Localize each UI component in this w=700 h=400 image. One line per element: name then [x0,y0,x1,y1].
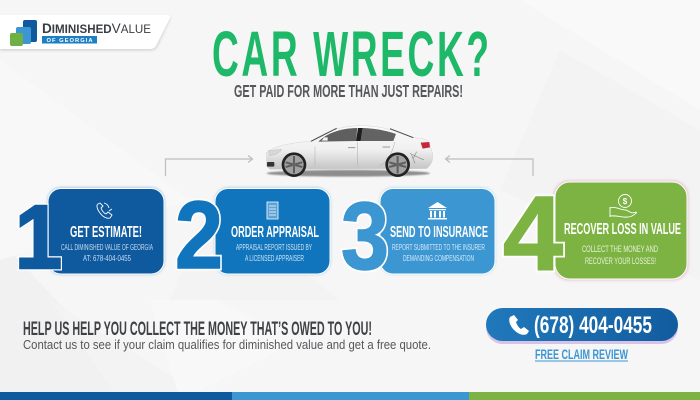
step heading: GET ESTIMATE! [70,224,142,241]
logo: DIMINISHEDVALUE [42,21,151,36]
number 4: 4 [503,175,563,293]
panel: step 1 get estimate [48,188,164,274]
logo: OF GEORGIA [46,38,93,44]
step description: APPRAISAL REPORT ISSUED BY [236,243,312,252]
step heading: SEND TO INSURANCE [390,224,488,241]
step description [61,243,153,263]
number 4: 4 [503,175,563,293]
panel: step 3 send to insurance [380,188,495,274]
icon: coin in hand: $ [623,197,628,206]
step description: CALL DIMINISHED VALUE OF GEORGIA [61,243,153,252]
footer colour bar [0,392,700,400]
number 2: 2 [175,182,223,289]
arrow: right to car [446,156,533,176]
icon: bank [428,202,447,220]
icon: phone [509,315,529,335]
step description [236,243,312,263]
number 3: 3 [341,183,389,290]
panel: step 2 order appraisal [215,188,330,274]
number 1: 1 [15,188,62,288]
number 3: 3 [341,183,389,290]
subtitle: GET PAID FOR MORE THAN JUST REPAIRS! [234,81,463,101]
phone number: (678) 404-0455 [534,312,652,339]
title: CAR WRECK? [212,20,492,91]
icon: phone [97,203,112,218]
step heading: ORDER APPRAISAL [231,224,319,241]
step description: A LICENSED APPRAISER [245,254,304,263]
link: free claim review [535,347,628,362]
step description: DEMANDING COMPENSATION [403,254,474,263]
icon: document [267,202,278,219]
call to action heading: HELP US HELP YOU COLLECT THE MONEY THAT’S OWED TO YOU! [23,318,372,340]
number 2: 2 [175,182,223,289]
call to action text: Contact us to see if your claim qualifies for diminished value and get a free quote. [23,338,431,352]
number 1: 1 [15,188,62,288]
illustration: damaged white car [266,126,433,177]
arrow: left to car [166,156,252,176]
link: free claim review: FREE CLAIM REVIEW [535,347,628,362]
panel: step 4 recover loss in value [554,181,688,280]
step description [392,243,485,263]
step description [582,244,658,267]
logo [0,15,170,50]
step description: AT: 678-404-0455 [83,254,131,263]
step description: REPORT SUBMITTED TO THE INSURER [392,243,485,252]
button: phone number [486,308,678,344]
